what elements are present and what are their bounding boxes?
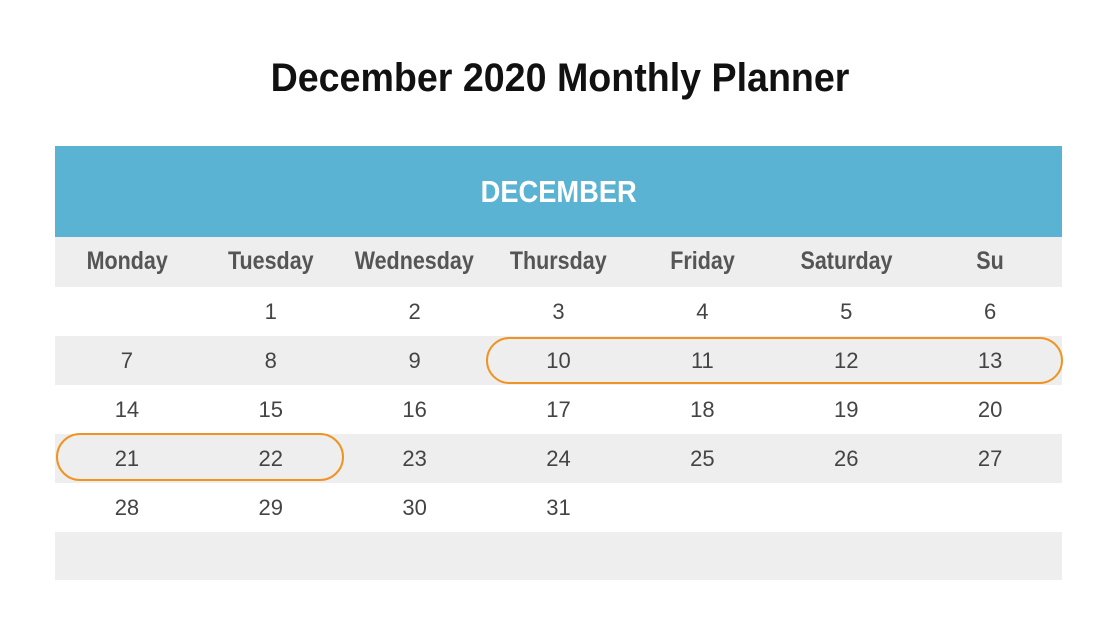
week 2 [55, 336, 1062, 385]
week 5: 29 [259, 495, 283, 520]
week 3: 19 [834, 397, 858, 422]
week 4: 27 [978, 446, 1002, 471]
week 3: 16 [402, 397, 427, 422]
week 5: 28 [115, 495, 139, 520]
week 3 [115, 397, 1002, 422]
week 4: 25 [690, 446, 715, 471]
header: month: DECEMBER [480, 174, 637, 209]
week 1: 6 [984, 299, 996, 324]
week 2: 7 [121, 348, 133, 373]
week 5: 31 [546, 495, 571, 520]
week 1: 3 [552, 299, 565, 324]
weekday row: Su [976, 247, 1004, 275]
empty week 6 [55, 532, 1062, 580]
week 3: 17 [546, 397, 571, 422]
week 4: 23 [402, 446, 427, 471]
week 3: 15 [259, 397, 283, 422]
week 2: 8 [265, 348, 277, 373]
highlight oval: 10-13 [486, 337, 1063, 384]
weekday row: Wednesday [355, 247, 474, 275]
header: month [55, 146, 1062, 237]
week 1: 1 [265, 299, 277, 324]
week 4: 24 [546, 446, 571, 471]
week 2: 9 [409, 348, 421, 373]
week 2: 12 [834, 348, 858, 373]
week 4: 26 [834, 446, 858, 471]
week 5: 30 [402, 495, 427, 520]
week 3: 14 [115, 397, 139, 422]
week 4: 22 [259, 446, 283, 471]
weekday row: Saturday [800, 247, 892, 275]
weekday row: Thursday [510, 247, 607, 275]
week 2: 13 [978, 348, 1002, 373]
week 4 [55, 434, 1062, 483]
weekday row: Friday [670, 247, 735, 275]
week 1: 5 [840, 299, 852, 324]
weekday row [55, 237, 1062, 287]
week 3: 18 [690, 397, 715, 422]
week 1: 2 [409, 299, 421, 324]
weekday row: Tuesday [228, 247, 314, 275]
week 4: 21 [115, 446, 139, 471]
week 1: 4 [696, 299, 708, 324]
highlight oval: 21-22 [56, 433, 344, 481]
title: December 2020 Monthly Planner [271, 56, 849, 100]
week 5 [115, 495, 571, 520]
week 1 [265, 299, 996, 324]
week 2: 10 [546, 348, 571, 373]
week 2: 11 [691, 348, 714, 373]
week 3: 20 [978, 397, 1002, 422]
weekday row: Monday [86, 247, 168, 275]
